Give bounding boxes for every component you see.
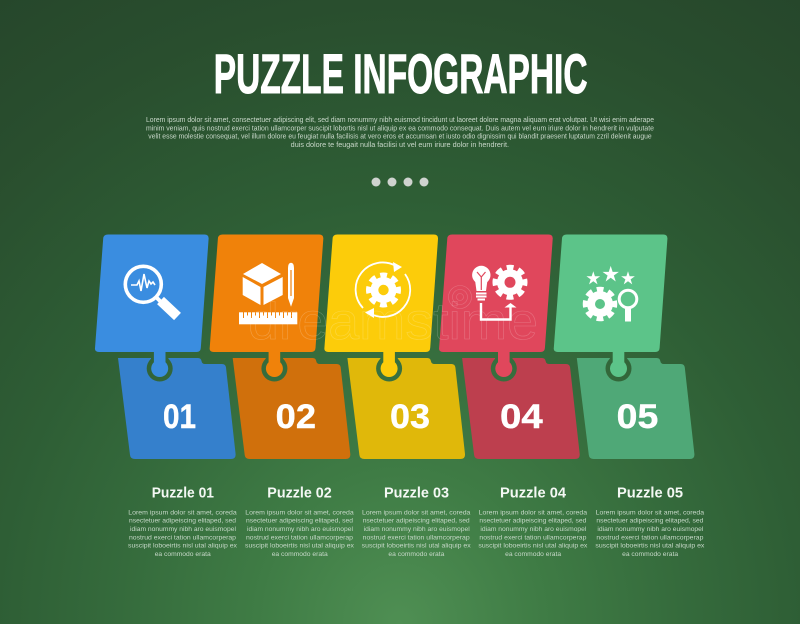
column text: puzzle 05: nsectetuer adipeiscing elitaped, sed	[596, 518, 704, 525]
column text: puzzle 01: Lorem ipsum dolor sit amet, coreda	[128, 509, 237, 516]
column text: puzzle 05: nostrud exerci tation ullamcorperap	[596, 534, 704, 541]
column text: puzzle 04: nsectetuer adipeiscing elitaped, sed	[479, 518, 587, 525]
icon: magnifier with pulse	[125, 266, 178, 316]
column text: puzzle 02: Puzzle 02	[267, 484, 332, 501]
column text: puzzle 04: Puzzle 04	[500, 484, 567, 501]
column text: puzzle 02	[245, 484, 355, 558]
column text: puzzle 01: ea commodo erata	[155, 551, 211, 558]
panel: puzzle 01	[95, 234, 236, 459]
icon: gear with cycle arrows	[356, 262, 410, 318]
column text: puzzle 03: Lorem ipsum dolor sit amet, coreda	[362, 509, 471, 516]
icon: stars, gear and magnifier	[586, 266, 637, 322]
number 02: 02	[276, 398, 316, 436]
column text: puzzle 01: suscipit loboeirtis nisl utal aliquip ex	[128, 542, 238, 549]
column text: puzzle 02: nostrud exerci tation ullamcorperap	[246, 534, 353, 541]
upper piece 02	[210, 234, 323, 377]
column text: puzzle 05: ea commodo erata	[622, 551, 678, 558]
column text: puzzle 03	[362, 484, 471, 558]
lower piece 05	[577, 358, 694, 459]
pagination dots	[372, 178, 428, 186]
column text: puzzle 03: nostrud exerci tation ullamcorperap	[363, 534, 470, 541]
column text: puzzle 01	[128, 484, 238, 558]
lower piece 01	[118, 358, 236, 459]
panel: puzzle 05	[554, 234, 694, 459]
panel: puzzle 03	[324, 234, 465, 459]
column text: puzzle 01: idiam nonummy nibh aro euismopel	[130, 526, 236, 533]
column text: puzzle 05	[595, 484, 705, 558]
column text: puzzle 05: suscipit loboeirtis nisl utal aliquip ex	[595, 542, 705, 549]
number 03: 03	[390, 398, 430, 436]
column text: puzzle 05: Lorem ipsum dolor sit amet, coreda	[596, 509, 704, 516]
column text: puzzle 01: nostrud exerci tation ullamcorperap	[129, 534, 236, 541]
lower piece 03	[347, 358, 465, 459]
intro text block: velit esse molestie consequat, vel illum dolore eu feugiat nulla facilisis at vero eros et accumsan et iusto odio dignissim qui blandit praesent luptatum zzril delenit augue	[148, 134, 652, 141]
column text: puzzle 04: Lorem ipsum dolor sit amet, coreda	[479, 509, 587, 516]
intro text block: minim veniam, quis nostrud exerci tation ullamcorper suscipit lobortis nisl ut aliquip ex ea commodo consequat. Duis autem vel eum iriure dolor in hendrerit in vulputate	[146, 125, 654, 132]
column text: puzzle 03: ea commodo erata	[388, 551, 445, 558]
tab cut-out 05	[606, 352, 632, 382]
upper piece 03	[324, 234, 438, 377]
column text: puzzle 01: nsectetuer adipeiscing elitaped, sed	[129, 518, 236, 525]
column text: puzzle 03: nsectetuer adipeiscing elitaped, sed	[363, 518, 470, 525]
column text: puzzle 02: idiam nonummy nibh aro euismopel	[247, 526, 353, 533]
tab cut-out 03	[376, 352, 402, 382]
lower piece 02	[233, 358, 350, 459]
upper piece 04	[439, 234, 553, 377]
lower piece 04	[462, 358, 580, 459]
icon: light bulb, gear and arrow	[472, 266, 524, 320]
intro text block: Lorem ipsum dolor sit amet, consectetuer adipiscing elit, sed diam nonummy nibh euismod tincidunt ut laoreet dolore magna aliquam erat volutpat. Ut wisi enim aderape	[146, 117, 654, 124]
column text: puzzle 05: Puzzle 05	[617, 484, 683, 501]
upper piece 05	[554, 234, 667, 377]
intro text block	[146, 117, 654, 149]
column text: puzzle 02: nsectetuer adipeiscing elitaped, sed	[246, 518, 353, 525]
upper piece 01	[95, 234, 209, 377]
column text: puzzle 02: ea commodo erata	[272, 551, 328, 558]
column text: puzzle 04: nostrud exerci tation ullamcorperap	[479, 534, 587, 541]
column text: puzzle 03: suscipit loboeirtis nisl utal aliquip ex	[362, 542, 471, 549]
tab cut-out 02	[261, 352, 287, 382]
column text: puzzle 02: suscipit loboeirtis nisl utal aliquip ex	[245, 542, 355, 549]
column text: puzzle 04: idiam nonummy nibh aro euismopel	[480, 526, 587, 533]
panel: puzzle 02	[210, 234, 350, 459]
column text: puzzle 03: idiam nonummy nibh aro euismopel	[364, 526, 470, 533]
column text: puzzle 03: Puzzle 03	[384, 484, 449, 501]
column text: puzzle 04: ea commodo erata	[505, 551, 561, 558]
panel: puzzle 04	[439, 234, 580, 459]
intro text block: duis dolore te feugait nulla facilisi ut vel eum iriure dolor in hendrerit.	[291, 142, 509, 149]
column text: puzzle 02: Lorem ipsum dolor sit amet, coreda	[245, 509, 354, 516]
column text: puzzle 01: Puzzle 01	[152, 484, 214, 501]
number 05: 05	[617, 398, 658, 436]
column text: puzzle 05: idiam nonummy nibh aro euismopel	[597, 526, 704, 533]
number 01: 01	[163, 398, 196, 436]
column text: puzzle 04	[478, 484, 588, 558]
icon: cube, pencil and ruler	[239, 263, 297, 324]
tab cut-out 04	[491, 352, 517, 382]
watermark: dreamstime	[248, 293, 538, 351]
column text: puzzle 04: suscipit loboeirtis nisl utal aliquip ex	[478, 542, 588, 549]
number 04: 04	[500, 398, 543, 436]
tab cut-out 01	[147, 352, 173, 382]
